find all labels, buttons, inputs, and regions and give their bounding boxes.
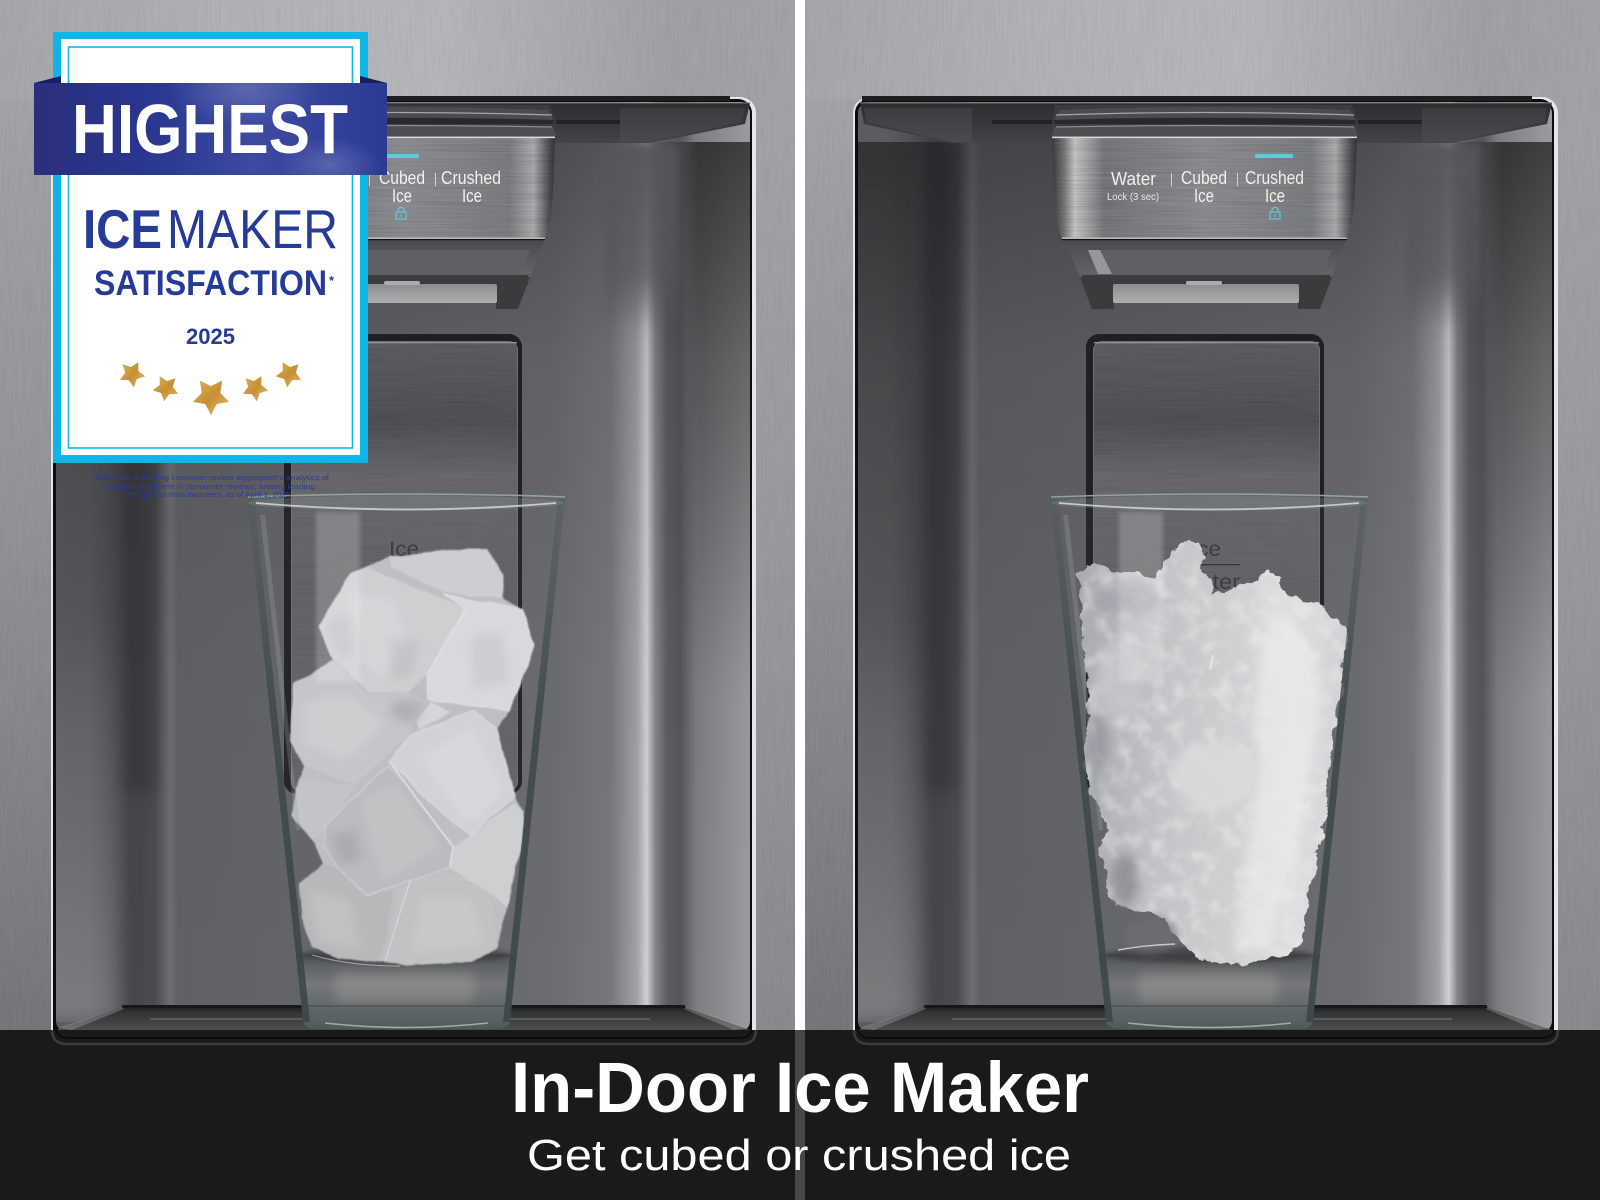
badge title: * [329, 273, 335, 288]
control module right [1052, 105, 1358, 309]
control module right: Cubed [1181, 168, 1227, 188]
dispenser recess left [40, 96, 770, 1045]
plate label left: Ice [389, 538, 419, 561]
icon: lock left [396, 207, 406, 219]
glass left [247, 494, 565, 1022]
ice facet shading [305, 590, 510, 966]
control module right: Crushed [1245, 168, 1304, 188]
plate label left [368, 538, 438, 594]
fine print: *Based on a leading customer review aggregator's analytics of [92, 473, 330, 482]
heading: In-Door Ice Maker [511, 1049, 1089, 1128]
ribbon [34, 76, 387, 175]
ice cubes [290, 549, 533, 965]
control module right: Lock (3 sec) [1107, 191, 1159, 203]
stars [118, 361, 303, 415]
control module right: Ice [1194, 186, 1214, 206]
control module left: Cubed [379, 168, 425, 188]
bright crushed streak [1235, 610, 1320, 950]
control module right: Water [1111, 169, 1156, 189]
glass base left [296, 947, 517, 1029]
plate label right [1170, 538, 1240, 594]
panel: right refrigerator dispenser [805, 0, 1600, 1045]
plate label right: Water [1178, 571, 1240, 594]
control module right: Ice [1265, 186, 1285, 206]
badge: highest ice maker satisfaction [34, 32, 387, 463]
icon: lock right [1270, 207, 1280, 219]
plate label right: Ice [1191, 538, 1221, 561]
fine print [92, 473, 330, 499]
active indicator: crushed [1255, 154, 1293, 158]
crushed ice [1078, 540, 1345, 965]
fine print: refrigerator manufacturers, as of April 1, 2025. [127, 490, 293, 499]
fine print: positive sentiment in consumer reviews, among leading [106, 482, 315, 491]
badge title: MAKER [167, 198, 338, 260]
badge title: 2025 [186, 324, 235, 349]
divider [795, 0, 805, 1030]
plate label left: Water [376, 571, 438, 594]
control module left: Crushed [441, 168, 501, 188]
glass base right [1099, 947, 1320, 1029]
badge title: ICE [83, 198, 162, 260]
ribbon: HIGHEST [72, 90, 348, 168]
bottom caption bar [0, 1030, 1600, 1200]
brushed steel door left [0, 0, 795, 1030]
panel: left refrigerator dispenser [0, 0, 795, 1045]
brushed steel door right [805, 0, 1600, 1030]
dispenser recess right [842, 96, 1572, 1045]
control module left: Ice [392, 186, 412, 206]
smooth ice chunk [1171, 741, 1259, 809]
control module left: Ice [462, 186, 482, 206]
badge title: SATISFACTION [94, 264, 327, 303]
subheading: Get cubed or crushed ice [527, 1131, 1071, 1180]
glass right [1050, 494, 1368, 1022]
badge title [83, 198, 338, 349]
control module left [250, 105, 556, 309]
active indicator: cubed [381, 154, 419, 158]
